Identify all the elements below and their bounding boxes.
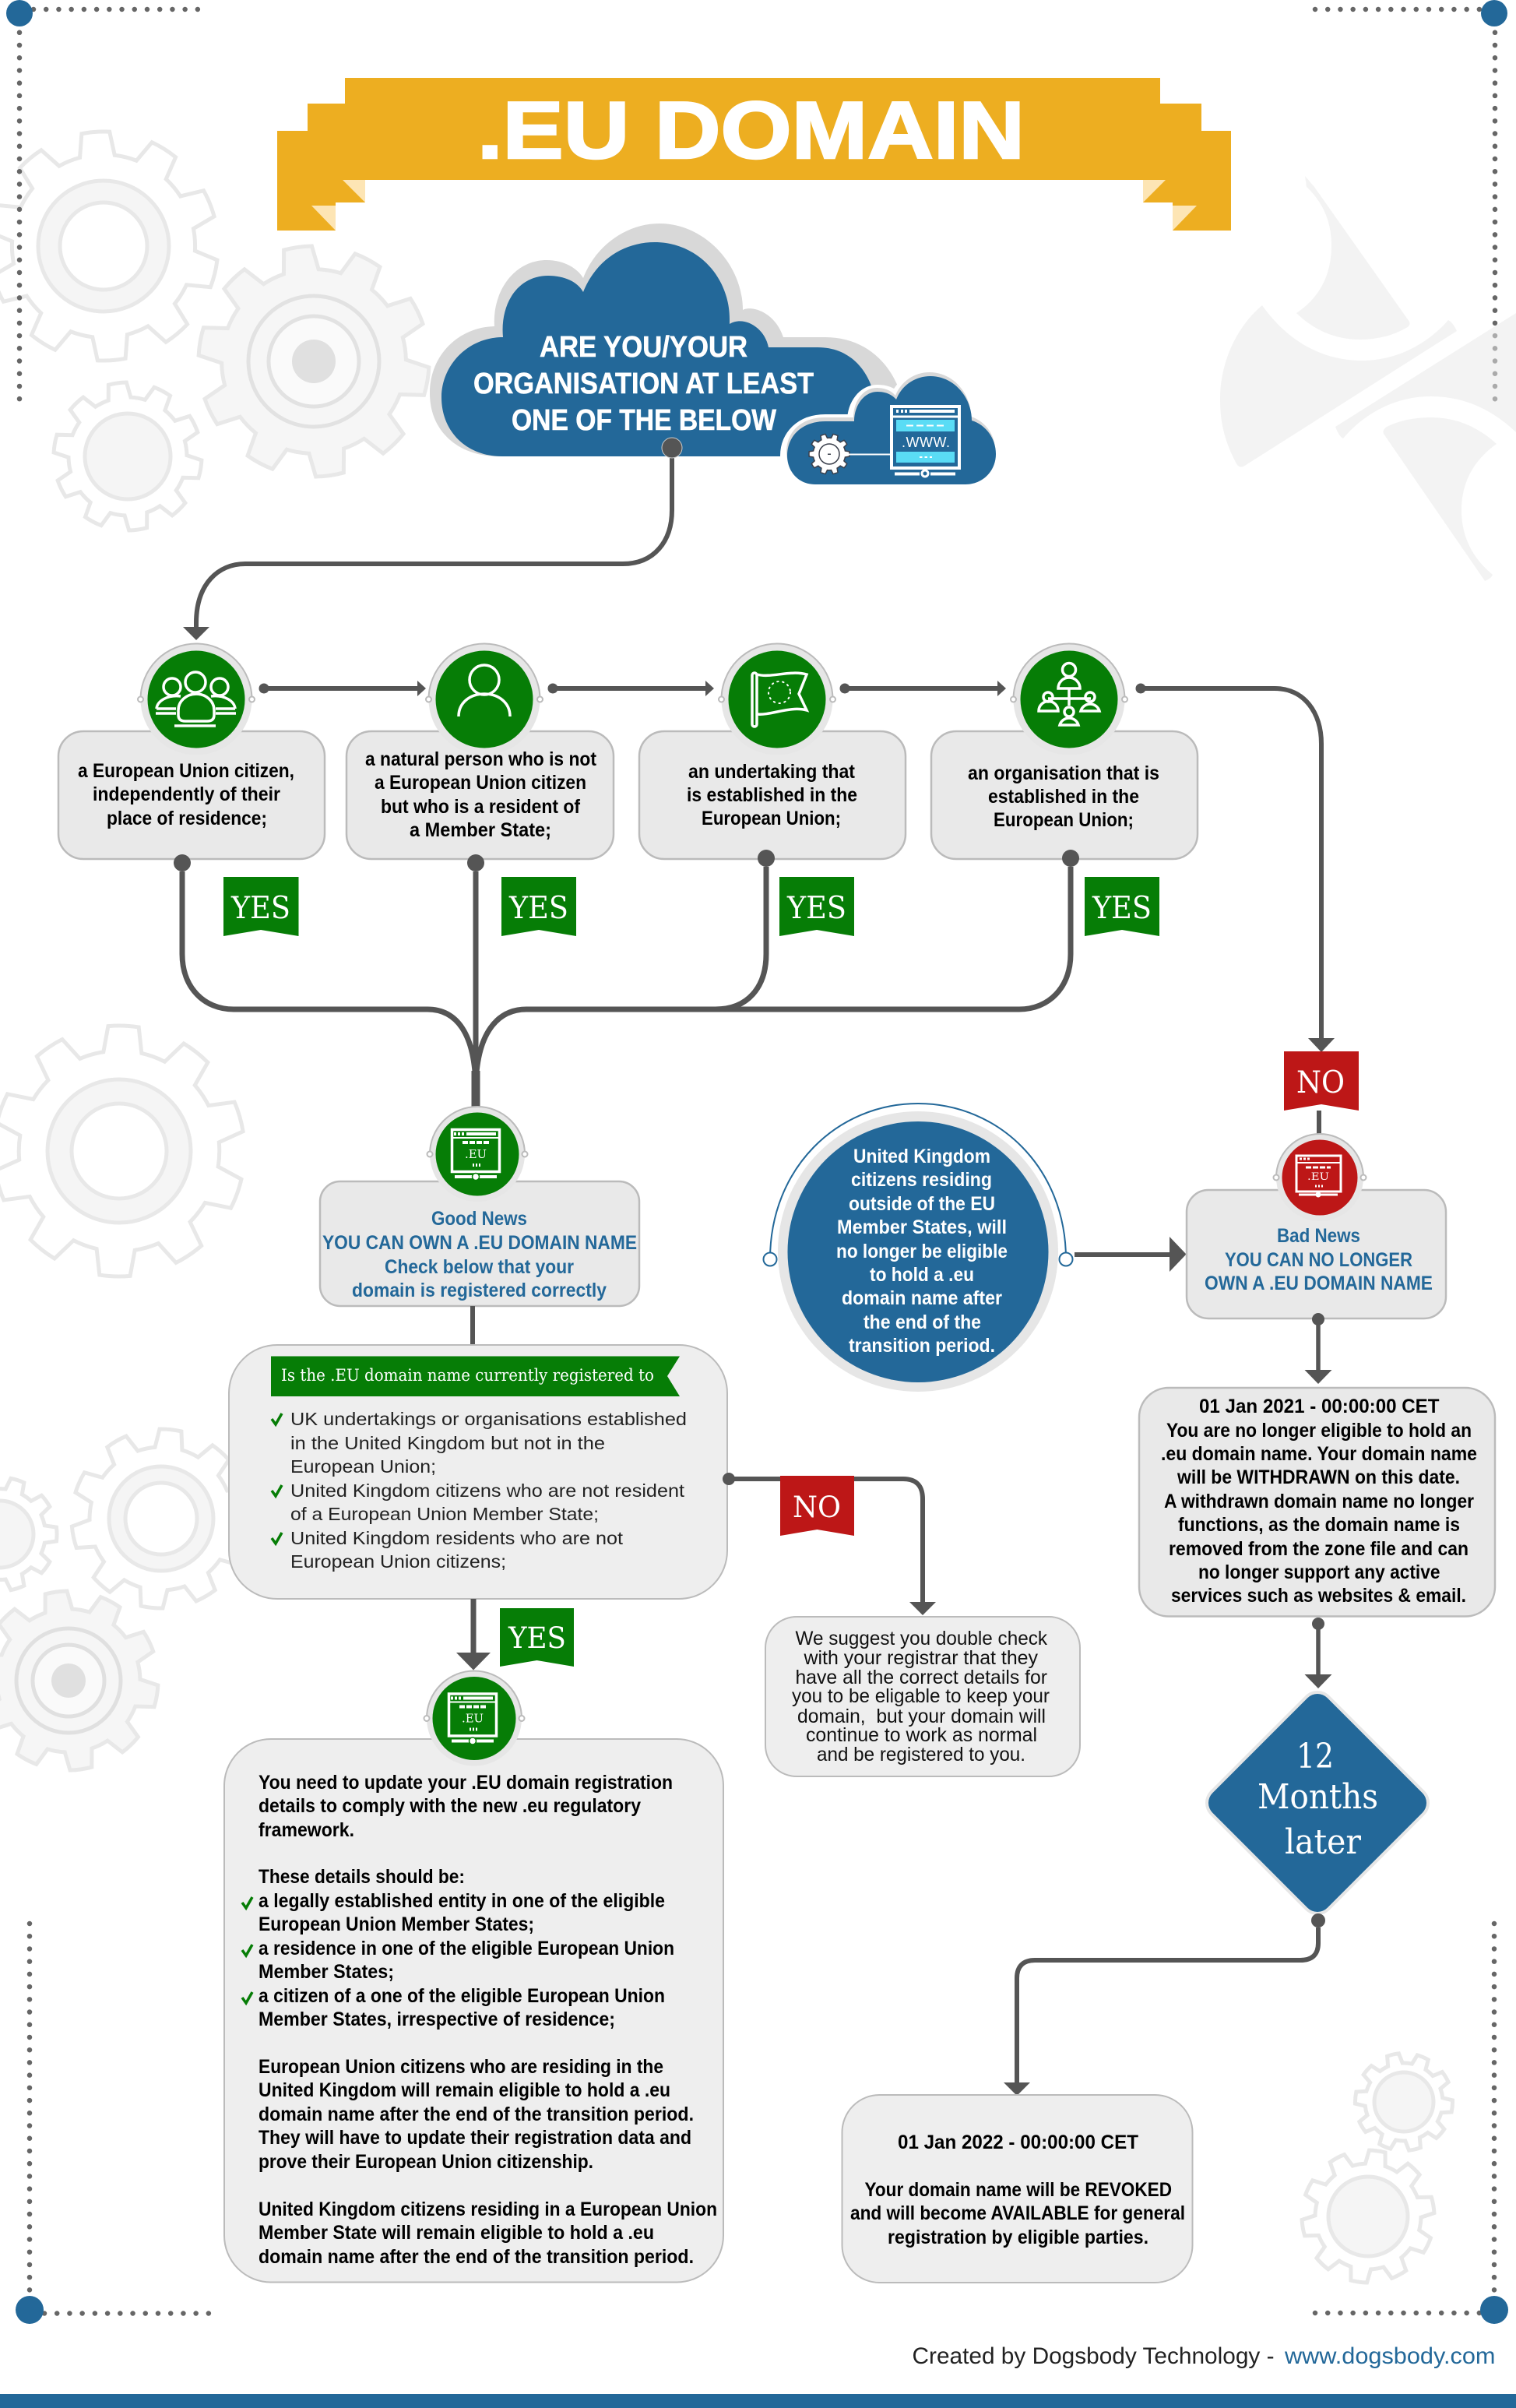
panel: double check suggestion: domain, but your domain will	[797, 1706, 1046, 1727]
checklist: United Kingdom citizens who are not resident	[290, 1480, 685, 1501]
flag: yes 3	[779, 877, 854, 936]
panel: update registration	[224, 1671, 723, 2282]
flag: yes 2: YES	[508, 891, 568, 926]
text: a Member State;	[410, 819, 551, 841]
flag: yes 1	[223, 877, 299, 936]
text	[322, 1208, 637, 1301]
panel: withdrawn date: 01 Jan 2021 - 00:00:00 CET	[1199, 1396, 1439, 1417]
footer bar	[0, 2394, 1516, 2408]
cloud text: ONE OF THE BELOW	[512, 404, 776, 437]
panel: criterion 3	[639, 643, 906, 867]
icon: .EU browser	[452, 1129, 500, 1181]
text: domain name after the end of the transition period.	[259, 2246, 694, 2268]
panel: UK citizens circle	[763, 1104, 1073, 1392]
panel: criterion 1	[58, 643, 325, 871]
icon: EU flag	[752, 673, 807, 727]
ribbon heading: Is the .EU domain name currently registered to	[281, 1366, 654, 1385]
cloud text	[473, 331, 814, 437]
text: a European Union citizen,	[78, 760, 294, 782]
text	[259, 1772, 717, 2268]
arrow: yes to update	[456, 1599, 491, 1670]
text: established in the	[988, 786, 1139, 808]
text: independently of their	[93, 783, 280, 805]
text: a European Union citizen	[375, 772, 586, 794]
arrows between criteria	[259, 681, 1006, 696]
background logo watermark	[1220, 176, 1516, 581]
text: transition period.	[849, 1335, 995, 1357]
text: European Union;	[702, 808, 841, 829]
text: European Union citizens who are residing in the	[259, 2056, 663, 2078]
text: a legally established entity in one of the eligible	[259, 1890, 665, 1912]
text: Check below that your	[385, 1256, 574, 1278]
flag: no right: NO	[1296, 1065, 1345, 1100]
cloud question	[430, 224, 902, 456]
arrow: cloud to first criterion	[183, 438, 682, 640]
text: a citizen of a one of the eligible European Union	[259, 1985, 665, 2007]
panel: double check suggestion: We suggest you double check	[796, 1628, 1047, 1649]
text: but who is a resident of	[381, 796, 581, 818]
text	[1205, 1225, 1433, 1294]
text: You need to update your .EU domain registration	[259, 1772, 673, 1794]
diamond: 12 months later: 12	[1296, 1737, 1334, 1776]
panel: double check suggestion	[765, 1617, 1080, 1776]
footer credit: Created by Dogsbody Technology -	[913, 2343, 1274, 2369]
footer credit	[913, 2343, 1495, 2369]
arrow: twelve months to revoked	[1004, 1913, 1325, 2096]
flag: yes 4: YES	[1092, 891, 1152, 926]
text: an organisation that is	[968, 762, 1159, 784]
checklist	[272, 1409, 687, 1572]
panel: criterion 4	[931, 643, 1198, 867]
text: to hold a .eu	[870, 1264, 974, 1286]
panel: double check suggestion: and be registered to you.	[817, 1744, 1025, 1766]
text: European Union Member States;	[259, 1913, 534, 1935]
text: citizens residing	[851, 1169, 992, 1191]
text: Member States, will	[837, 1216, 1007, 1238]
text: Member State will remain eligible to hold a .eu	[259, 2222, 654, 2244]
flag: no: NO	[793, 1491, 841, 1524]
text: framework.	[259, 1819, 354, 1841]
flag: yes: YES	[508, 1621, 566, 1655]
text: European Union;	[994, 809, 1134, 831]
text: United Kingdom	[853, 1146, 990, 1167]
panel: withdrawn date: .eu domain name. Your domain name	[1161, 1443, 1477, 1465]
panel: withdrawn date: will be WITHDRAWN on this date.	[1177, 1466, 1460, 1488]
text: YOU CAN OWN A .EU DOMAIN NAME	[322, 1232, 637, 1254]
text: place of residence;	[107, 808, 267, 829]
text: an undertaking that	[688, 761, 856, 783]
arrow: bad news to date	[1305, 1313, 1331, 1384]
text: outside of the EU	[849, 1193, 995, 1215]
panel: revoked date: 01 Jan 2022 - 00:00:00 CET	[898, 2132, 1138, 2153]
checklist: of a European Union Member State;	[290, 1504, 599, 1524]
arrow: no to suggestion	[723, 1473, 936, 1615]
panel: revoked date	[842, 2095, 1193, 2283]
panel: withdrawn date: removed from the zone file and can	[1169, 1538, 1469, 1560]
flag: no right	[1284, 1051, 1359, 1111]
arrow: UK circle to bad news	[1075, 1237, 1187, 1272]
arrow: no branch to bad news	[1135, 684, 1335, 1137]
text: the end of the	[864, 1311, 981, 1333]
text: is established in the	[687, 784, 857, 806]
icon: .EU browser red	[1296, 1156, 1341, 1198]
icon: person	[459, 665, 510, 716]
flag: yes 3: YES	[786, 891, 846, 926]
icon: organisation	[1039, 664, 1099, 725]
text: no longer be eligible	[836, 1241, 1008, 1262]
text	[836, 1146, 1008, 1357]
text: a natural person who is not	[365, 748, 597, 770]
panel: good news	[320, 1107, 639, 1306]
icon: .EU browser red: .EU	[1307, 1171, 1329, 1183]
text: These details should be:	[259, 1866, 465, 1888]
panel: bad news	[1187, 1134, 1446, 1318]
panel: withdrawn date	[1139, 1388, 1495, 1617]
text: Member States, irrespective of residence;	[259, 2008, 615, 2030]
footer credit: www.dogsbody.com	[1284, 2343, 1495, 2369]
text	[365, 748, 597, 841]
panel: criterion 2	[346, 643, 614, 871]
panel: double check suggestion: continue to work as normal	[806, 1724, 1037, 1746]
panel: double check suggestion: have all the correct details for	[796, 1667, 1047, 1688]
text: Bad News	[1277, 1225, 1360, 1247]
flag: no	[780, 1476, 854, 1536]
check marks	[242, 1897, 252, 2003]
connectors: yes branches	[182, 867, 1071, 1110]
text: YOU CAN NO LONGER	[1225, 1249, 1412, 1271]
text: domain name after the end of the transition period.	[259, 2103, 694, 2125]
panel: withdrawn date: You are no longer eligible to hold an	[1166, 1420, 1472, 1442]
flag: yes 4	[1085, 877, 1159, 936]
panel: double check suggestion: you to be eligable to keep your	[792, 1685, 1050, 1707]
text	[78, 760, 294, 829]
connector: good news to check	[470, 1306, 475, 1345]
cloud text: ORGANISATION AT LEAST	[473, 368, 814, 400]
icon: .EU browser: .EU	[462, 1712, 484, 1726]
ribbon heading	[271, 1357, 680, 1396]
text: domain name after	[842, 1287, 1002, 1309]
flag: yes 1: YES	[230, 891, 290, 926]
text: a residence in one of the eligible European Union	[259, 1938, 674, 1959]
title: .EU DOMAIN	[477, 86, 1025, 176]
text: They will have to update their registration data and	[259, 2127, 691, 2149]
panel: revoked date: registration by eligible parties.	[888, 2227, 1148, 2248]
diamond: 12 months later	[1222, 1708, 1412, 1898]
title banner	[277, 78, 1231, 231]
icon: people group	[156, 672, 236, 726]
icon: .EU browser	[448, 1694, 497, 1744]
text	[687, 761, 857, 829]
checklist: United Kingdom residents who are not	[290, 1528, 624, 1548]
arrow: date to twelve months	[1305, 1618, 1331, 1688]
text: United Kingdom will remain eligible to hold a .eu	[259, 2079, 670, 2101]
checklist: in the United Kingdom but not in the	[290, 1433, 605, 1453]
flag: yes 2	[501, 877, 576, 936]
text: details to comply with the new .eu regulatory	[259, 1795, 641, 1817]
panel: withdrawn date: no longer support any active	[1198, 1561, 1440, 1583]
text	[968, 762, 1159, 831]
panel: revoked date: Your domain name will be REVOKED	[864, 2179, 1172, 2201]
checklist: European Union;	[290, 1456, 436, 1477]
panel: double check suggestion: with your registrar that they	[804, 1647, 1038, 1669]
checklist: UK undertakings or organisations established	[290, 1409, 687, 1429]
icon: .EU browser: .EU	[465, 1147, 487, 1161]
icon: small web cloud	[786, 372, 996, 484]
cloud text: ARE YOU/YOUR	[540, 331, 747, 364]
panel: revoked date: and will become AVAILABLE for general	[850, 2202, 1185, 2224]
panel: withdrawn date: services such as websites & email.	[1171, 1585, 1466, 1607]
panel: withdrawn date: A withdrawn domain name no longer	[1164, 1491, 1474, 1512]
diamond: 12 months later: Months	[1257, 1777, 1378, 1817]
flag: yes	[500, 1608, 574, 1667]
text: United Kingdom citizens residing in a European Union	[259, 2199, 717, 2220]
panel: check registration	[229, 1345, 727, 1599]
text: OWN A .EU DOMAIN NAME	[1205, 1273, 1433, 1294]
icon: small web cloud: .WWW.	[902, 435, 950, 450]
panel: withdrawn date: functions, as the domain name is	[1178, 1514, 1460, 1536]
text: Member States;	[259, 1961, 394, 1983]
text: prove their European Union citizenship.	[259, 2151, 593, 2173]
diamond: 12 months later: later	[1285, 1822, 1362, 1862]
checklist: European Union citizens;	[290, 1551, 506, 1572]
text: domain is registered correctly	[352, 1280, 607, 1301]
text: Good News	[431, 1208, 527, 1230]
